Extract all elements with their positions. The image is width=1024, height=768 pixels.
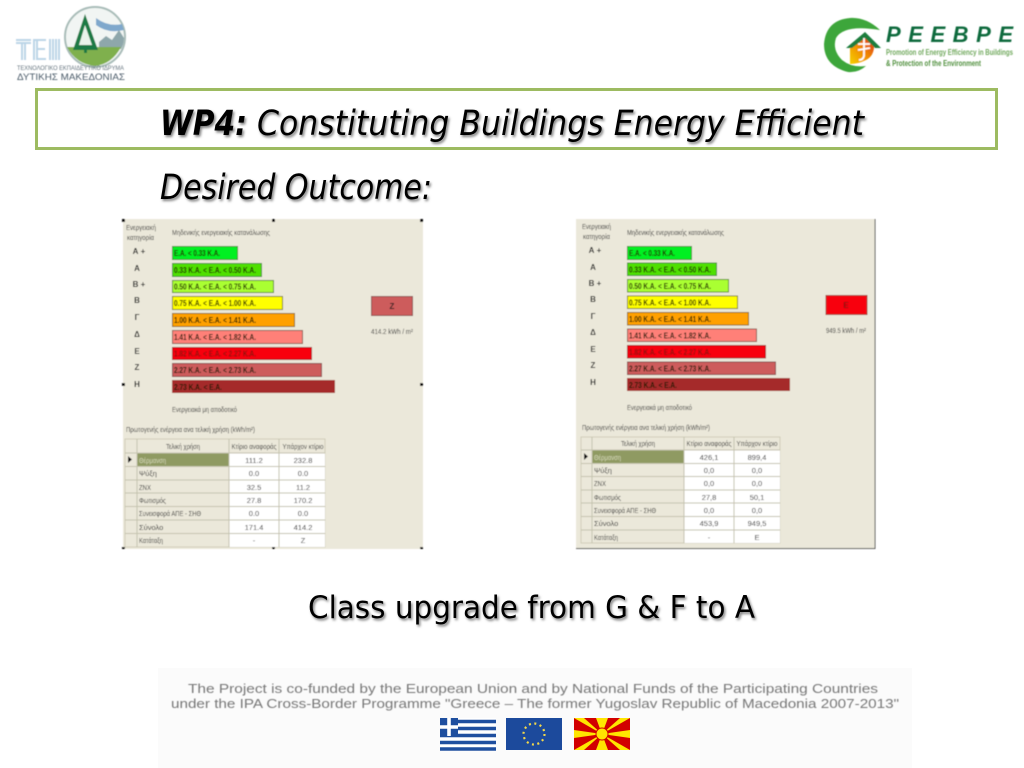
energy class scale bars: 2.73 Κ.Α. < Ε.Α. bbox=[174, 382, 222, 392]
title: WP4: bbox=[160, 104, 247, 144]
table: primary energy by end use: Ε bbox=[754, 533, 760, 542]
panel header labels: Μηδενικής ενεργειακής κατανάλωσης bbox=[172, 228, 270, 237]
energy class scale bars: 0.50 Κ.Α. < Ε.Α. < 0.75 Κ.Α. bbox=[174, 282, 256, 292]
panel: improved building energy certificate bbox=[122, 219, 423, 549]
energy class scale bars: Α bbox=[134, 264, 140, 273]
logo text: tagline bbox=[886, 48, 1014, 68]
table: primary energy by end use: Κτίριο αναφοράς bbox=[232, 442, 277, 451]
logo mark: mountain circle bbox=[65, 7, 125, 67]
energy class scale bars: 0.75 Κ.Α. < Ε.Α. < 1.00 Κ.Α. bbox=[174, 298, 256, 308]
funding statement: The Project is co-funded by the European Union and by National Funds of the Participating Countries bbox=[188, 682, 878, 696]
energy class scale bars bbox=[589, 246, 790, 391]
table: primary energy by end use: 0.0 bbox=[298, 509, 308, 518]
table: primary energy by end use: 0,0 bbox=[752, 466, 762, 475]
panel header labels: Ενεργειακή bbox=[582, 222, 611, 231]
table: primary energy by end use: 899,4 bbox=[748, 453, 766, 462]
table: primary energy by end use: 414.2 bbox=[294, 523, 312, 532]
table: primary energy by end use: 453,9 bbox=[700, 519, 718, 528]
footer: funding banner bbox=[158, 668, 912, 768]
table: primary energy by end use: Κτίριο αναφοράς bbox=[686, 439, 732, 448]
energy class scale bars: 0.33 Κ.Α. < Ε.Α. < 0.50 Κ.Α. bbox=[174, 265, 256, 275]
energy class scale bars: Α + bbox=[133, 247, 146, 256]
logo: PEEBPE bbox=[824, 18, 1014, 72]
title box bbox=[36, 90, 996, 148]
energy class scale bars: Α + bbox=[589, 246, 602, 255]
class result badge: Ζ bbox=[390, 302, 395, 311]
conclusion text: Class upgrade from G & F to A bbox=[308, 590, 755, 626]
energy class scale bars: Δ bbox=[134, 330, 140, 339]
energy class scale bars: Η bbox=[590, 378, 596, 387]
energy class scale bars: Β bbox=[590, 295, 596, 304]
table heading: Πρωτογενής ενέργεια ανα τελική χρήση (kWh/m²) bbox=[582, 423, 710, 432]
table: primary energy by end use: 0.0 bbox=[249, 509, 259, 518]
table: primary energy by end use: 27,8 bbox=[702, 493, 716, 502]
icon: flag of North Macedonia bbox=[574, 718, 630, 750]
energy class scale bars: Β bbox=[134, 296, 140, 305]
table: primary energy by end use: Ψύξη bbox=[594, 466, 612, 475]
table: primary energy by end use: 0.0 bbox=[298, 469, 308, 478]
panel: existing building energy certificate bbox=[576, 219, 875, 549]
table: primary energy by end use: Υπάρχον κτίριο bbox=[736, 439, 778, 448]
table heading: Πρωτογενής ενέργεια ανα τελική χρήση (kWh/m²) bbox=[126, 425, 255, 434]
energy class scale bars: 1.41 Κ.Α. < Ε.Α. < 1.82 Κ.Α. bbox=[629, 330, 711, 340]
funding statement: under the IPA Cross-Border Programme "Greece – The former Yugoslav Republic of Macedonia 2007-2013" bbox=[171, 697, 899, 711]
table: primary energy by end use: 0,0 bbox=[704, 506, 714, 515]
logo text: tagline: & Protection of the Environment bbox=[886, 59, 981, 68]
logo mark: TEI letters bbox=[16, 39, 60, 60]
energy class scale bars: 0.75 Κ.Α. < Ε.Α. < 1.00 Κ.Α. bbox=[629, 298, 711, 308]
energy class scale bars: 2.73 Κ.Α. < Ε.Α. bbox=[629, 380, 677, 390]
panel header labels: Ενεργειακή bbox=[126, 223, 156, 232]
table: primary energy by end use: Ζ bbox=[301, 536, 306, 545]
energy class scale bars: 1.41 Κ.Α. < Ε.Α. < 1.82 Κ.Α. bbox=[174, 332, 256, 342]
class result badge bbox=[371, 296, 413, 336]
energy class scale bars: Ε.Α. < 0.33 Κ.Α. bbox=[629, 248, 675, 258]
class result badge: 414.2 kWh / m² bbox=[371, 327, 413, 336]
logo text: institution name bbox=[17, 66, 125, 82]
table: primary energy by end use: 0,0 bbox=[752, 506, 762, 515]
energy class scale bars: Η bbox=[134, 380, 140, 389]
table: primary energy by end use: 232.8 bbox=[294, 456, 312, 465]
table: primary energy by end use: Ψύξη bbox=[139, 469, 157, 478]
table: primary energy by end use: - bbox=[708, 533, 711, 542]
table: primary energy by end use: ΖΝΧ bbox=[139, 483, 151, 492]
logo text: institution name: ΔΥΤΙΚΗΣ ΜΑΚΕΔΟΝΙΑΣ bbox=[17, 72, 125, 82]
panel header labels bbox=[582, 222, 724, 241]
table: primary energy by end use bbox=[581, 437, 780, 543]
energy class scale bars: 1.82 Κ.Α. < Ε.Α. < 2.27 Κ.Α. bbox=[174, 348, 256, 358]
table: primary energy by end use: Φωτισμός bbox=[139, 496, 166, 505]
energy class scale bars: Γ bbox=[135, 313, 140, 322]
table: primary energy by end use: Τελική χρήση bbox=[621, 439, 655, 448]
funding statement bbox=[171, 682, 899, 711]
energy class scale bars: 2.27 Κ.Α. < Ε.Α. < 2.73 Κ.Α. bbox=[629, 364, 711, 374]
table: primary energy by end use: Σύνολο bbox=[594, 519, 618, 528]
icon: flag of the European Union bbox=[506, 718, 562, 750]
scale footer label: Ενεργειακά μη αποδοτικό bbox=[627, 403, 692, 412]
energy class scale bars: Ζ bbox=[591, 361, 596, 370]
logo text: institution name: ΤΕΧΝΟΛΟΓΙΚΟ ΕΚΠΑΙΔΕΥΤΙΚΟ ΙΔΡΥΜΑ bbox=[17, 66, 124, 72]
logo mark: green swirl and house bbox=[824, 18, 881, 72]
table: primary energy by end use: 949,5 bbox=[748, 519, 766, 528]
energy class scale bars: 0.50 Κ.Α. < Ε.Α. < 0.75 Κ.Α. bbox=[629, 281, 711, 291]
table: primary energy by end use: 50,1 bbox=[750, 493, 764, 502]
table: primary energy by end use bbox=[125, 439, 325, 547]
subtitle: desired outcome: Desired Outcome: bbox=[160, 168, 432, 208]
table: primary energy by end use: 0.0 bbox=[249, 469, 259, 478]
panel header labels: Μηδενικής ενεργειακής κατανάλωσης bbox=[627, 228, 724, 237]
scale footer label: Ενεργειακά μη αποδοτικό bbox=[172, 405, 237, 414]
table: primary energy by end use: Σύνολο bbox=[139, 523, 163, 532]
table: primary energy by end use: Συνεισφορά ΑΠΕ - ΣΗΘ bbox=[594, 506, 656, 515]
table: primary energy by end use: Τελική χρήση bbox=[166, 442, 200, 451]
table: primary energy by end use: Κατάταξη bbox=[594, 533, 618, 542]
icon: flag of Greece bbox=[440, 718, 496, 750]
table: primary energy by end use: Συνεισφορά ΑΠΕ - ΣΗΘ bbox=[139, 509, 201, 518]
panel header labels: κατηγορία bbox=[583, 232, 611, 241]
class result badge: Ε bbox=[843, 301, 849, 310]
logo: TEI Western Macedonia bbox=[16, 7, 125, 82]
energy class scale bars: 1.82 Κ.Α. < Ε.Α. < 2.27 Κ.Α. bbox=[629, 347, 711, 357]
table: primary energy by end use: 111.2 bbox=[245, 456, 263, 465]
energy class scale bars: Ε bbox=[590, 345, 596, 354]
title: Constituting Buildings Energy Efficient bbox=[257, 104, 865, 144]
energy class scale bars: Γ bbox=[591, 312, 596, 321]
table: primary energy by end use: - bbox=[253, 536, 256, 545]
energy class scale bars: Ε.Α. < 0.33 Κ.Α. bbox=[174, 248, 220, 258]
class result badge: 949.5 kWh / m² bbox=[826, 326, 866, 335]
table: primary energy by end use: 32.5 bbox=[247, 483, 261, 492]
table: primary energy by end use: Θέρμανση bbox=[594, 453, 621, 462]
energy class scale bars: 0.33 Κ.Α. < Ε.Α. < 0.50 Κ.Α. bbox=[629, 264, 711, 274]
table: primary energy by end use: ΖΝΧ bbox=[594, 479, 606, 488]
table: primary energy by end use: 0,0 bbox=[704, 479, 714, 488]
table: primary energy by end use: 0,0 bbox=[752, 479, 762, 488]
panel header labels: κατηγορία bbox=[127, 233, 155, 242]
table: primary energy by end use: 170.2 bbox=[294, 496, 312, 505]
energy class scale bars bbox=[133, 246, 335, 393]
energy class scale bars: Ζ bbox=[135, 363, 140, 372]
table: primary energy by end use: 27.8 bbox=[247, 496, 261, 505]
energy class scale bars: 1.00 Κ.Α. < Ε.Α. < 1.41 Κ.Α. bbox=[629, 314, 711, 324]
energy class scale bars: Ε bbox=[134, 347, 140, 356]
table: primary energy by end use: Κατάταξη bbox=[139, 536, 163, 545]
table: primary energy by end use: 171.4 bbox=[245, 523, 263, 532]
energy class scale bars: 1.00 Κ.Α. < Ε.Α. < 1.41 Κ.Α. bbox=[174, 315, 256, 325]
table: primary energy by end use: Θέρμανση bbox=[139, 456, 166, 465]
table: primary energy by end use: 426,1 bbox=[700, 453, 718, 462]
panel header labels bbox=[126, 223, 270, 242]
table: primary energy by end use: 0,0 bbox=[704, 466, 714, 475]
energy class scale bars: Β + bbox=[589, 279, 602, 288]
logo text: PEEBPE: PEEBPE bbox=[886, 22, 1014, 47]
table: primary energy by end use: Υπάρχον κτίριο bbox=[282, 442, 324, 451]
class result badge bbox=[826, 296, 867, 335]
energy class scale bars: 2.27 Κ.Α. < Ε.Α. < 2.73 Κ.Α. bbox=[174, 365, 256, 375]
table: primary energy by end use: 11.2 bbox=[296, 483, 310, 492]
table: primary energy by end use: Φωτισμός bbox=[594, 493, 621, 502]
energy class scale bars: Β + bbox=[133, 280, 146, 289]
selection handles bbox=[122, 219, 423, 549]
energy class scale bars: Α bbox=[590, 263, 596, 272]
energy class scale bars: Δ bbox=[590, 328, 596, 337]
